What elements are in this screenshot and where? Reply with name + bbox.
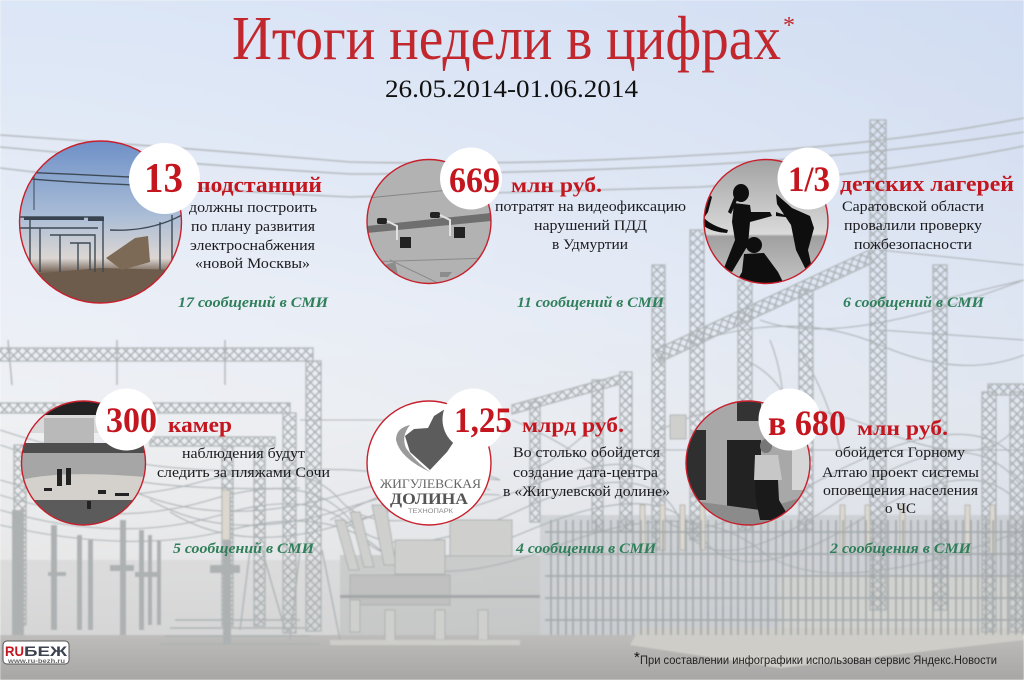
media mentions: 17 сообщений в СМИ [178,295,329,311]
description: в Удмуртии [552,237,628,253]
title: Итоги недели в цифрах [232,5,781,73]
number: 669 [449,160,500,200]
logo wordmark: ЖИГУЛЕВСКАЯ [380,476,481,491]
unit: подстанций [197,172,322,197]
description: следить за пляжами Сочи [157,465,330,481]
description: создание дата-центра [513,465,658,481]
description: оповещения населения [823,483,978,499]
media mentions: 2 сообщения в СМИ [829,541,972,557]
white number badge [96,388,158,450]
description [157,446,330,481]
panel: 13 substations [19,141,329,311]
logo: RUBEZH [3,641,69,665]
panel: 300 cameras [21,388,330,557]
logo wordmark [380,476,481,515]
photo: substation [19,141,182,304]
right lower structures [545,520,1024,635]
description: в «Жигулевской долине» [503,484,670,500]
description: по плану развития [191,219,315,235]
number: в 680 [768,403,846,443]
media mentions: 6 сообщений в СМИ [843,295,985,311]
media mentions: 11 сообщений в СМИ [517,295,665,311]
logo: RUBEZH: RU [5,643,24,659]
unit: млрд руб. [522,413,624,437]
description: наблюдения будут [182,446,305,462]
footnote: При составлении инфографики использован сервис Яндекс.Новости [640,653,997,667]
panel: 669 million [367,148,686,311]
description: пожбезопасности [854,237,972,253]
footnote: * [634,649,640,666]
white number badge [129,143,200,214]
description [495,199,686,253]
description: должны построить [189,200,317,216]
media mentions: 4 сообщения в СМИ [515,541,657,557]
unit: камер [168,412,232,437]
description: провалили проверку [844,218,983,234]
lower equipment posts [12,500,240,645]
description: Во столько обойдется [513,445,660,461]
photo: traffic cameras [367,159,491,284]
description: о ЧС [885,501,916,517]
logo: RUBEZH: БЕЖ [24,643,67,659]
description [822,445,979,517]
description: Алтаю проект системы [822,465,979,481]
number: 13 [144,156,183,202]
description: обойдется Горному [835,445,966,461]
unit: детских лагерей [840,171,1014,196]
dense lower right haze [540,515,1024,635]
description [842,199,984,253]
insulators [222,490,995,555]
panel: 680 million [686,388,979,557]
media mentions: 5 сообщений в СМИ [173,541,315,557]
logo: RUBEZH: www.ru-bezh.ru [7,658,65,665]
number: 1/3 [788,159,830,199]
white number badge [442,388,504,450]
photo: Sochi beach [21,401,146,525]
description [189,200,317,272]
logo wordmark: ДОЛИНА [390,491,468,508]
description: электроснабжения [190,238,315,254]
description: нарушений ПДД [534,218,647,234]
logo circle: Zhigulevskaya Dolina [367,401,491,525]
number: 300 [106,400,157,440]
description: потратят на видеофиксацию [495,199,686,215]
heart map mark [405,409,455,470]
photo: children silhouettes [704,159,828,284]
logo wordmark: ТЕХНОПАРК [408,509,454,515]
description: Саратовской области [842,199,984,215]
unit: млн руб. [857,416,948,440]
panel: 1/3 camps [704,148,1014,311]
bottom ground [0,635,1024,680]
white number badge [778,148,840,210]
description [503,445,670,500]
panel: 1.25 billion [367,388,670,557]
photo: speaker [686,401,810,526]
date range: 26.05.2014-01.06.2014 [385,76,639,103]
number: 1,25 [454,400,512,440]
title footnote asterisk: * [783,13,795,39]
description: «новой Москвы» [195,256,310,272]
white number badge [440,148,502,210]
white number badge [758,388,820,450]
unit: млн руб. [511,173,602,197]
